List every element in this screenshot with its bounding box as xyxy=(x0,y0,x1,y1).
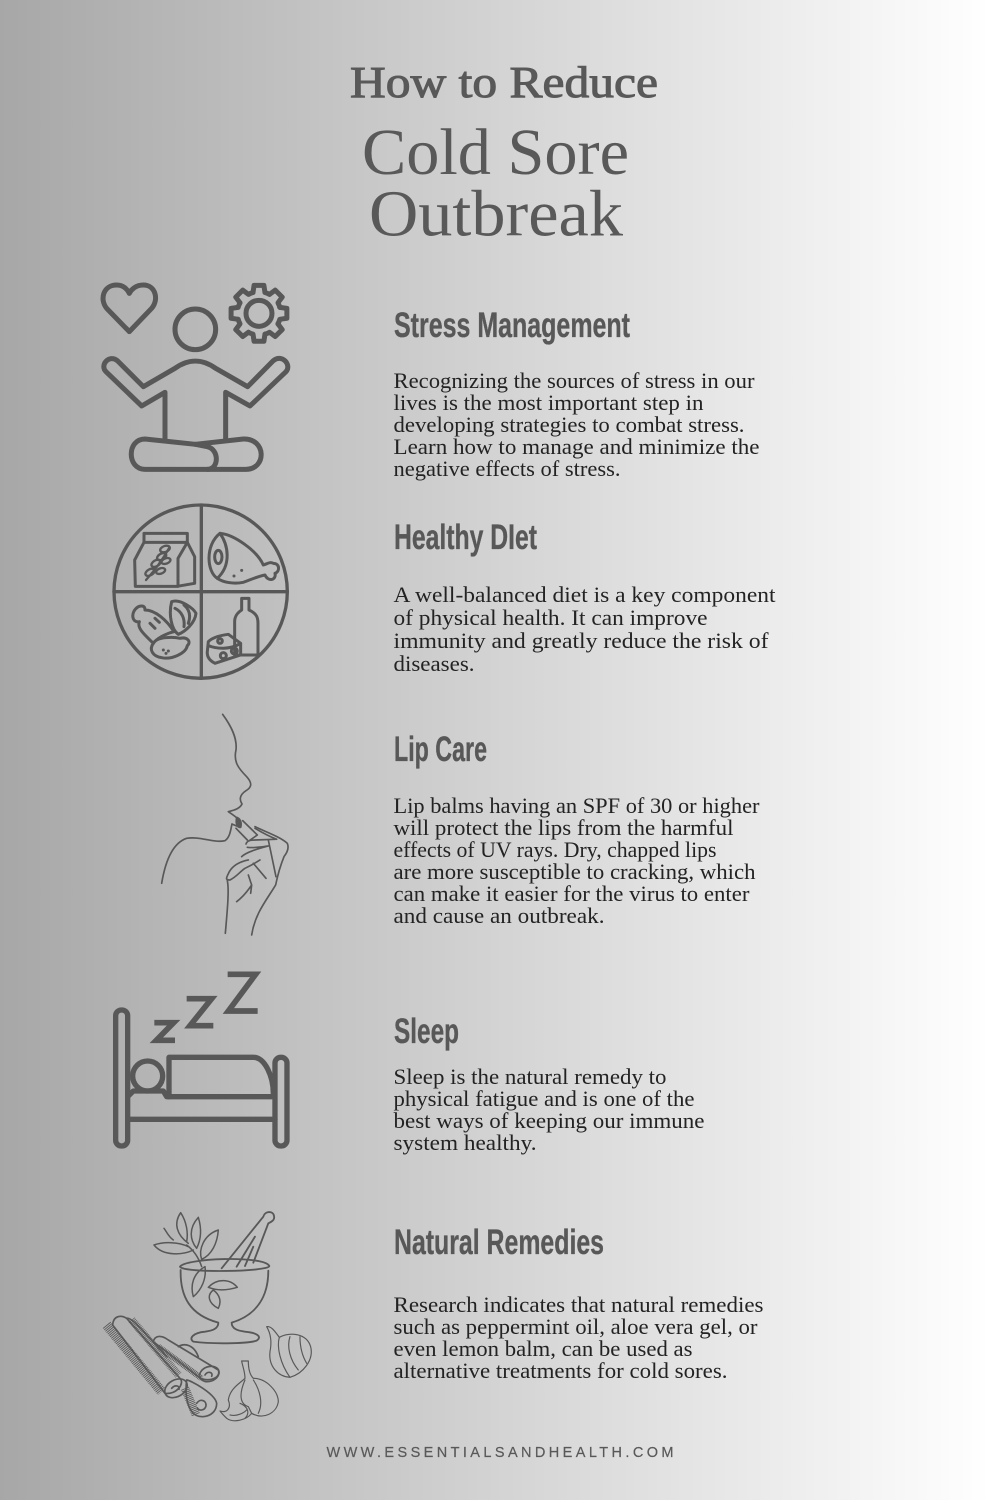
body xyxy=(394,1292,764,1383)
icon: profile applying lip balm xyxy=(162,714,288,935)
body: Sleep is the natural remedy to xyxy=(394,1064,666,1089)
icon: person sleeping in bed xyxy=(116,974,287,1146)
cinnamon sticks xyxy=(113,1316,221,1417)
body: Research indicates that natural remedies xyxy=(394,1292,764,1317)
body: even lemon balm, can be used as xyxy=(394,1336,692,1361)
body: best ways of keeping our immune xyxy=(394,1108,704,1133)
text block: natural remedies xyxy=(394,1223,764,1383)
text block: stress management xyxy=(394,306,760,481)
body: of physical health. It can improve xyxy=(394,605,708,630)
title line: Cold Sore: Cold Sore xyxy=(362,116,629,189)
body: immunity and greatly reduce the risk of xyxy=(394,628,769,653)
body: can make it easier for the virus to enter xyxy=(394,881,750,906)
text block: sleep xyxy=(394,1012,704,1155)
body: lives is the most important step in xyxy=(394,390,704,415)
text block: healthy diet xyxy=(394,518,776,676)
heading: Lip Care xyxy=(394,730,487,769)
icon: mortar, herbs, cinnamon and garlic xyxy=(107,1212,311,1421)
cinnamon hatching xyxy=(107,1320,202,1415)
body: are more susceptible to cracking, which xyxy=(394,859,756,884)
icon: meditating person with heart and gear xyxy=(103,285,288,469)
body: Learn how to manage and minimize the xyxy=(394,434,760,459)
body xyxy=(394,1064,704,1155)
garlic bulbs xyxy=(220,1327,311,1421)
body xyxy=(394,582,776,676)
body: alternative treatments for cold sores. xyxy=(394,1358,728,1383)
body: will protect the lips from the harmful xyxy=(394,815,734,840)
body: system healthy. xyxy=(394,1130,536,1155)
heading: Sleep xyxy=(394,1012,459,1051)
body: and cause an outbreak. xyxy=(394,903,604,928)
body: physical fatigue and is one of the xyxy=(394,1086,694,1111)
body: diseases. xyxy=(394,651,474,676)
icon: plate with food groups xyxy=(114,505,287,678)
heading: Natural Remedies xyxy=(394,1223,604,1262)
body xyxy=(394,793,760,928)
title xyxy=(350,58,658,250)
body: Lip balms having an SPF of 30 or higher xyxy=(394,793,760,818)
body: A well-balanced diet is a key component xyxy=(394,582,776,607)
body: negative effects of stress. xyxy=(394,456,620,481)
body: such as peppermint oil, aloe vera gel, or xyxy=(394,1314,758,1339)
body xyxy=(394,368,760,481)
heading: Stress Management xyxy=(394,306,630,345)
footer url: WWW.ESSENTIALSANDHEALTH.COM xyxy=(326,1445,674,1461)
heading: Healthy DIet xyxy=(394,518,537,557)
title line: How to Reduce: How to Reduce xyxy=(350,58,658,107)
text block: lip care xyxy=(394,730,760,928)
body: developing strategies to combat stress. xyxy=(394,412,744,437)
title line: Outbreak: Outbreak xyxy=(369,178,623,250)
body: Recognizing the sources of stress in our xyxy=(394,368,755,393)
body: effects of UV rays. Dry, chapped lips xyxy=(394,837,716,862)
